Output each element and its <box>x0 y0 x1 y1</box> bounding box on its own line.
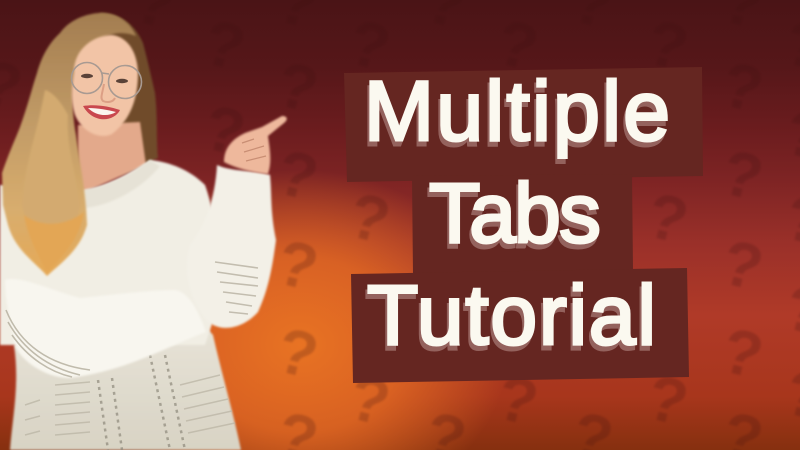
background with question mark pattern: ? <box>270 313 325 393</box>
background with question mark pattern: ? <box>640 360 695 440</box>
eyes <box>81 74 128 83</box>
background with question mark pattern: ? <box>270 135 325 215</box>
title line 2: Tabs: Tabs <box>427 171 599 265</box>
glasses <box>72 62 142 98</box>
background with question mark pattern: ? <box>640 178 695 258</box>
upper sweater <box>0 160 220 345</box>
title line 1: Multiple: Multiple <box>362 69 668 163</box>
background with question mark pattern: ? <box>490 360 545 440</box>
forearm ribs <box>6 310 90 377</box>
lower sweater body <box>10 320 241 450</box>
background with question mark pattern: ? <box>342 5 397 85</box>
nose <box>101 84 115 102</box>
background with question mark pattern: ? <box>490 5 545 85</box>
sleeve ribs <box>215 262 258 314</box>
title line 3: Tutorial: Tutorial <box>365 273 654 367</box>
background with question mark pattern: ? <box>342 360 397 440</box>
background with question mark pattern: ? <box>640 5 695 85</box>
woman in white sweater pointing <box>0 11 288 450</box>
background with question mark pattern: ? <box>270 225 325 305</box>
background with question mark pattern: ? <box>715 47 770 127</box>
face <box>72 35 138 136</box>
smile <box>83 105 120 119</box>
title line 1: Multiple: Multiple <box>364 64 670 158</box>
neck <box>78 122 146 195</box>
background with question mark pattern: ? <box>342 178 397 258</box>
lower body knit ribs <box>25 355 235 450</box>
finger detail <box>242 139 266 161</box>
title background bands <box>344 67 703 383</box>
background with question mark pattern: ? <box>715 225 770 305</box>
background with question mark pattern: ? <box>197 5 252 85</box>
title line 2: Tabs: Tabs <box>429 166 601 260</box>
raised sleeve <box>187 165 276 328</box>
background with question mark pattern: ? <box>715 313 770 393</box>
background with question mark pattern: ? <box>197 90 252 170</box>
title line 3: Tutorial: Tutorial <box>367 268 656 362</box>
front hair flowing over shoulder <box>2 13 136 276</box>
background with question mark pattern: ? <box>270 47 325 127</box>
sweater collar <box>84 160 160 208</box>
forearm across waist <box>5 279 206 378</box>
back hair <box>90 13 158 175</box>
background with question mark pattern: ? <box>715 135 770 215</box>
pointing hand <box>224 116 287 174</box>
